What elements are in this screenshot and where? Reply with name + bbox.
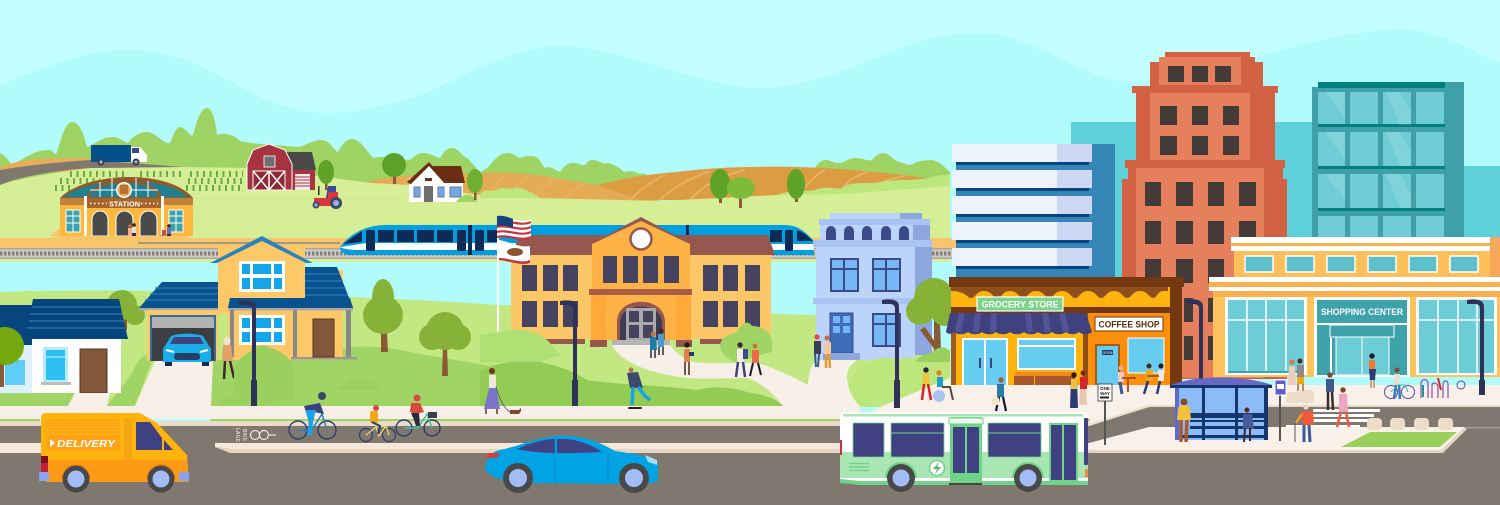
delivery label <box>46 435 120 450</box>
shopper at entrance <box>1369 353 1376 388</box>
person pushing wheelchair <box>922 367 953 402</box>
planter <box>1341 432 1457 447</box>
station arches <box>92 211 157 236</box>
tower lower windows <box>1145 182 1256 360</box>
tower top windows <box>1168 66 1231 82</box>
railway platform and tracks <box>0 236 1125 259</box>
upper windows <box>1245 256 1478 272</box>
tree right of farmhouse <box>467 169 483 200</box>
campus bushes <box>480 323 783 406</box>
bumpy bushes at left <box>0 290 45 310</box>
school building <box>511 217 775 347</box>
midground grass <box>0 291 950 406</box>
main sidewalk <box>0 406 1090 426</box>
left storefront glass <box>1225 297 1307 375</box>
seated person at shelter <box>1243 408 1254 442</box>
white office building <box>952 144 1115 277</box>
tower middle windows <box>1160 106 1239 155</box>
left gold hill edge <box>0 158 90 172</box>
school roof <box>511 235 775 255</box>
bike lane marking: LANE <box>234 428 240 443</box>
school entrance <box>617 302 665 340</box>
two women by grocery <box>1070 370 1087 408</box>
station sign: STATION <box>109 200 140 208</box>
student in coral jacket <box>750 344 761 376</box>
small bush by grocery <box>915 347 950 362</box>
sidewalk right plaza <box>860 362 1500 424</box>
bus wheels <box>885 462 1044 492</box>
bollards <box>1286 390 1453 430</box>
two-storey house <box>139 236 357 361</box>
coffee door <box>1095 344 1120 385</box>
blue building windows <box>831 259 900 346</box>
tree left edge <box>0 327 24 387</box>
elderly man with cane <box>1295 404 1314 442</box>
road curb right <box>1089 406 1500 425</box>
school pediment <box>587 217 695 246</box>
one way sign <box>1098 384 1112 445</box>
bus shelter <box>1170 378 1272 440</box>
bus stop sign <box>1275 380 1286 441</box>
electric car in garage <box>163 334 211 366</box>
delivery label: DELIVERY <box>57 438 116 450</box>
light rail train <box>340 225 814 255</box>
street lamps <box>239 299 1485 408</box>
shopping center entrance <box>1314 297 1410 377</box>
station windows <box>66 210 183 232</box>
barn <box>247 144 316 190</box>
teal glass tower <box>1312 82 1464 282</box>
pedestrians at crosswalk <box>1326 372 1349 427</box>
tree right of house <box>363 279 403 352</box>
platform fence <box>138 243 340 247</box>
train station <box>50 177 197 236</box>
cafe patrons <box>1118 364 1164 394</box>
white house roof <box>25 299 128 339</box>
orange farm fields <box>363 167 932 203</box>
tower light facades <box>1136 57 1264 378</box>
right storefront glass <box>1416 297 1497 375</box>
tree by farmhouse <box>382 153 406 184</box>
tractor <box>312 186 342 209</box>
student with laptop <box>684 342 694 375</box>
campus walkway <box>612 345 860 406</box>
california flag <box>499 240 530 264</box>
students on campus path <box>650 328 831 377</box>
man with bicycle and bike rack <box>1384 368 1465 399</box>
shopping center <box>1209 237 1500 377</box>
back teal building <box>1071 122 1500 278</box>
lawn bushes left <box>216 345 382 406</box>
red brick tower <box>1122 52 1287 379</box>
coffee door: OPEN <box>1103 351 1113 355</box>
light green field <box>0 167 950 262</box>
american flag <box>497 216 531 239</box>
crop rows <box>55 174 243 188</box>
bus rear door <box>1049 423 1078 481</box>
shade tree by grocery <box>906 278 959 352</box>
flag pole <box>497 218 499 348</box>
cornice scallops <box>951 287 1168 298</box>
house gable roof <box>210 236 313 263</box>
bicyclist adult <box>289 392 336 439</box>
grocery window <box>1017 338 1076 370</box>
couple near bollards <box>1288 358 1304 391</box>
student pair at door <box>650 328 664 358</box>
lower window <box>239 315 285 345</box>
delivery truck on rural road <box>91 145 147 166</box>
garage <box>150 315 216 361</box>
van window <box>136 422 162 450</box>
bicyclist with basket <box>396 394 440 436</box>
skateboarder <box>627 368 650 409</box>
coffee window <box>1128 338 1164 373</box>
bus windows <box>853 423 1041 457</box>
white house <box>25 299 128 406</box>
neighbor blue house <box>0 305 33 393</box>
far hills left <box>0 108 480 190</box>
coffee shop sign: COFFEE SHOP <box>1098 320 1160 330</box>
grocery and coffee shop <box>946 277 1184 385</box>
man with shopping bag <box>992 377 1006 411</box>
grocery store sign: GROCERY STORE <box>982 300 1058 310</box>
people at station <box>128 223 171 242</box>
delivery van <box>39 413 189 492</box>
crosswalk <box>1286 409 1380 427</box>
shopping center sign <box>1317 300 1407 323</box>
woman by house <box>222 336 234 379</box>
woman at shelter <box>1177 398 1191 442</box>
house front door <box>313 319 334 357</box>
upper window <box>239 261 285 292</box>
road <box>0 407 1500 505</box>
campus lawn right <box>848 358 950 407</box>
blue civic building <box>813 213 932 360</box>
grocery doors <box>962 338 1008 385</box>
woman walking dog <box>484 368 521 414</box>
field bushes right <box>777 174 950 195</box>
student with backpack <box>736 342 748 377</box>
one way sign: ONE <box>1100 386 1110 391</box>
van wheels <box>61 464 176 492</box>
driveway <box>135 361 213 406</box>
bike lane marking: BIKE <box>241 429 247 442</box>
school clock <box>630 228 652 250</box>
far hills middle <box>480 153 650 188</box>
one way sign: WAY <box>1100 391 1110 396</box>
bike lane marking <box>234 428 276 443</box>
fence drawn again over platform <box>138 242 340 244</box>
bus front door <box>949 417 983 485</box>
small lawns <box>0 346 500 406</box>
sedan wheels <box>503 463 649 493</box>
awning <box>946 313 1092 334</box>
trees beside houses <box>107 290 145 330</box>
field bushes left <box>480 187 540 198</box>
blue sedan <box>485 436 658 493</box>
dog <box>510 408 521 414</box>
road median <box>0 443 1090 453</box>
rural road <box>0 160 183 185</box>
shopping center entrance: SHOPPING CENTER <box>1321 307 1403 318</box>
farmhouse <box>407 162 477 202</box>
blue building door <box>830 313 853 353</box>
round tree on lawn <box>419 312 471 376</box>
pair by blue building <box>814 334 831 368</box>
produce crates <box>1014 372 1076 385</box>
bus vents <box>849 464 869 470</box>
bus lightning badge <box>930 460 944 476</box>
bicyclist child <box>360 405 396 442</box>
upper arched windows <box>826 226 909 240</box>
electric bus <box>840 412 1088 492</box>
trees on orange hills <box>710 169 805 208</box>
tree near barn <box>318 160 334 190</box>
far hills right <box>815 153 950 190</box>
bus stop island <box>1089 390 1500 453</box>
